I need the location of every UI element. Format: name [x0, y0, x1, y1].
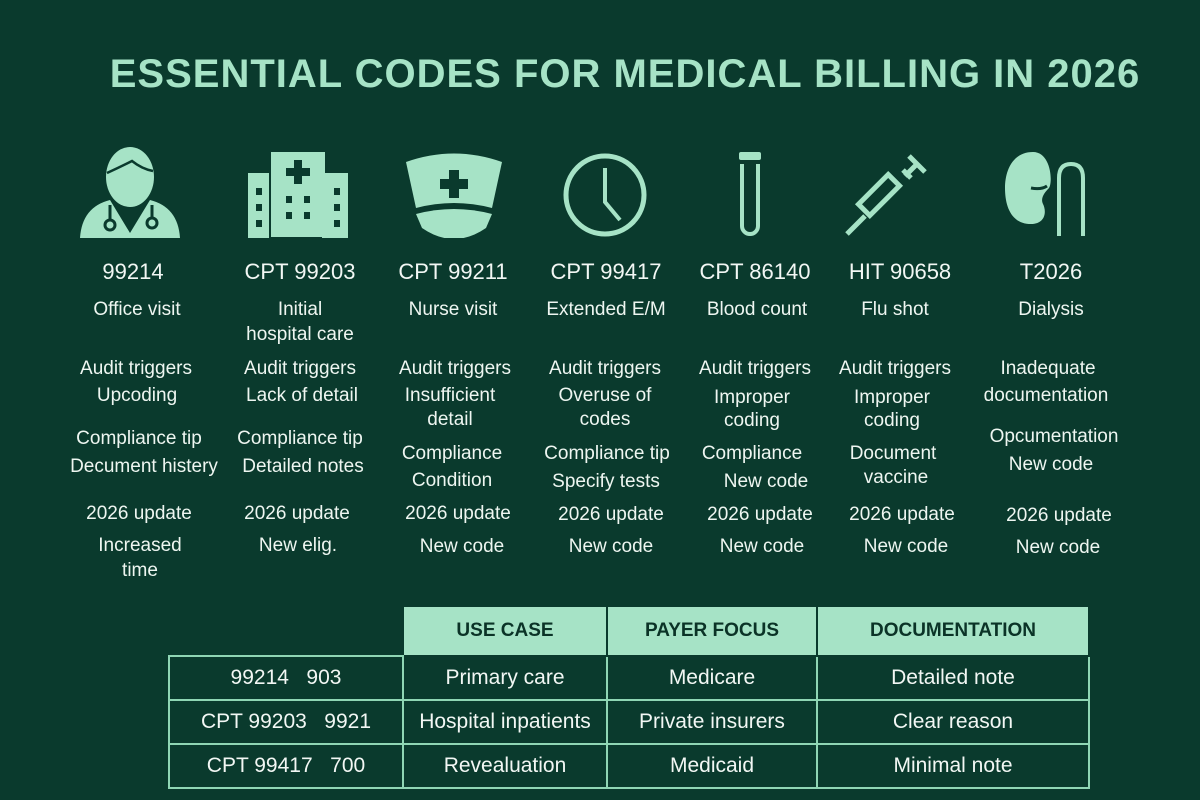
text: 2026 update	[244, 503, 350, 524]
text: 2026 update	[558, 504, 664, 525]
text: Compliance tip	[76, 428, 202, 449]
text: Audit triggers	[244, 358, 356, 379]
icon: kidney	[1005, 152, 1085, 236]
text: Office visit	[93, 299, 181, 320]
text: Increased	[98, 535, 182, 556]
table: Detailed note	[891, 666, 1015, 689]
text: CPT 99211	[398, 259, 508, 284]
text: Condition	[412, 470, 492, 491]
text: Audit triggers	[399, 358, 511, 379]
table: Revealuation	[444, 754, 566, 777]
table: CPT 99417 700	[207, 754, 365, 777]
text: codes	[580, 409, 630, 430]
text: CPT 99417	[551, 259, 661, 284]
text: New code	[864, 536, 948, 557]
text: Decument histery	[70, 456, 218, 477]
text: Lack of detail	[246, 385, 358, 406]
text: 2026 update	[1006, 505, 1112, 526]
table: USE CASE	[456, 620, 554, 641]
text: coding	[724, 410, 780, 431]
text: Upcoding	[97, 385, 177, 406]
text: Document	[850, 443, 936, 464]
text: detail	[427, 409, 473, 430]
text: 2026 update	[86, 503, 192, 524]
table: PAYER FOCUS	[645, 620, 779, 641]
text: Dialysis	[1018, 299, 1084, 320]
icon: hospital	[248, 152, 348, 238]
text: vaccine	[864, 467, 928, 488]
text: 99214	[102, 259, 164, 284]
text: Detailed notes	[242, 456, 364, 477]
text: 2026 update	[849, 504, 955, 525]
text: Compliance	[702, 443, 802, 464]
text: Nurse visit	[409, 299, 497, 320]
text: coding	[864, 410, 920, 431]
column: CPT 99211	[398, 259, 511, 557]
text: Audit triggers	[699, 358, 811, 379]
column: T2026	[984, 259, 1118, 558]
text: Extended E/M	[546, 299, 666, 320]
text: New code	[569, 536, 653, 557]
text: 2026 update	[707, 504, 813, 525]
text: Compliance	[402, 443, 502, 464]
text: Initial	[278, 299, 322, 320]
text: time	[122, 560, 158, 581]
text: New code	[724, 471, 808, 492]
title: ESSENTIAL CODES FOR MEDICAL BILLING IN 2026	[110, 52, 1140, 96]
icon: nurse cap	[406, 154, 502, 238]
text: T2026	[1020, 259, 1082, 284]
text: New code	[420, 536, 504, 557]
text: Audit triggers	[80, 358, 192, 379]
text: Audit triggers	[549, 358, 661, 379]
table: 99214 903	[231, 666, 341, 689]
icon: syringe	[845, 154, 927, 236]
text: Specify tests	[552, 471, 660, 492]
text: Blood count	[707, 299, 807, 320]
column: CPT 99417	[544, 259, 670, 557]
text: Opcumentation	[990, 426, 1118, 447]
text: 2026 update	[405, 503, 511, 524]
table: DOCUMENTATION	[870, 620, 1036, 641]
text: CPT 99203	[245, 259, 355, 284]
text: Improper	[714, 387, 790, 408]
text: documentation	[984, 385, 1108, 406]
column: CPT 99203	[237, 259, 364, 556]
text: Audit triggers	[839, 358, 951, 379]
text: Overuse of	[559, 385, 651, 406]
text: Compliance tip	[544, 443, 670, 464]
column: HIT 90658	[839, 259, 955, 557]
column: 99214	[70, 259, 218, 581]
text: New code	[720, 536, 804, 557]
text: Insufficient	[405, 385, 495, 406]
table: Medicaid	[670, 754, 754, 777]
table: Medicare	[669, 666, 755, 689]
table: CPT 99203 9921	[201, 710, 371, 733]
table	[168, 607, 1090, 789]
icon: doctor	[80, 147, 180, 238]
icon: clock	[564, 154, 646, 236]
text: hospital care	[246, 324, 354, 345]
text: Inadequate	[1000, 358, 1096, 379]
text: New code	[1009, 454, 1093, 475]
text: New elig.	[259, 535, 337, 556]
text: Compliance tip	[237, 428, 363, 449]
table: Private insurers	[639, 710, 785, 733]
text: New code	[1016, 537, 1100, 558]
icon: test tube	[739, 152, 761, 236]
text: Flu shot	[861, 299, 929, 320]
text: HIT 90658	[849, 259, 951, 284]
text: CPT 86140	[700, 259, 810, 284]
text: Improper	[854, 387, 930, 408]
column: CPT 86140	[699, 259, 813, 557]
table: Clear reason	[893, 710, 1013, 733]
table: Hospital inpatients	[419, 710, 591, 733]
table: Minimal note	[893, 754, 1013, 777]
table: Primary care	[445, 666, 565, 689]
